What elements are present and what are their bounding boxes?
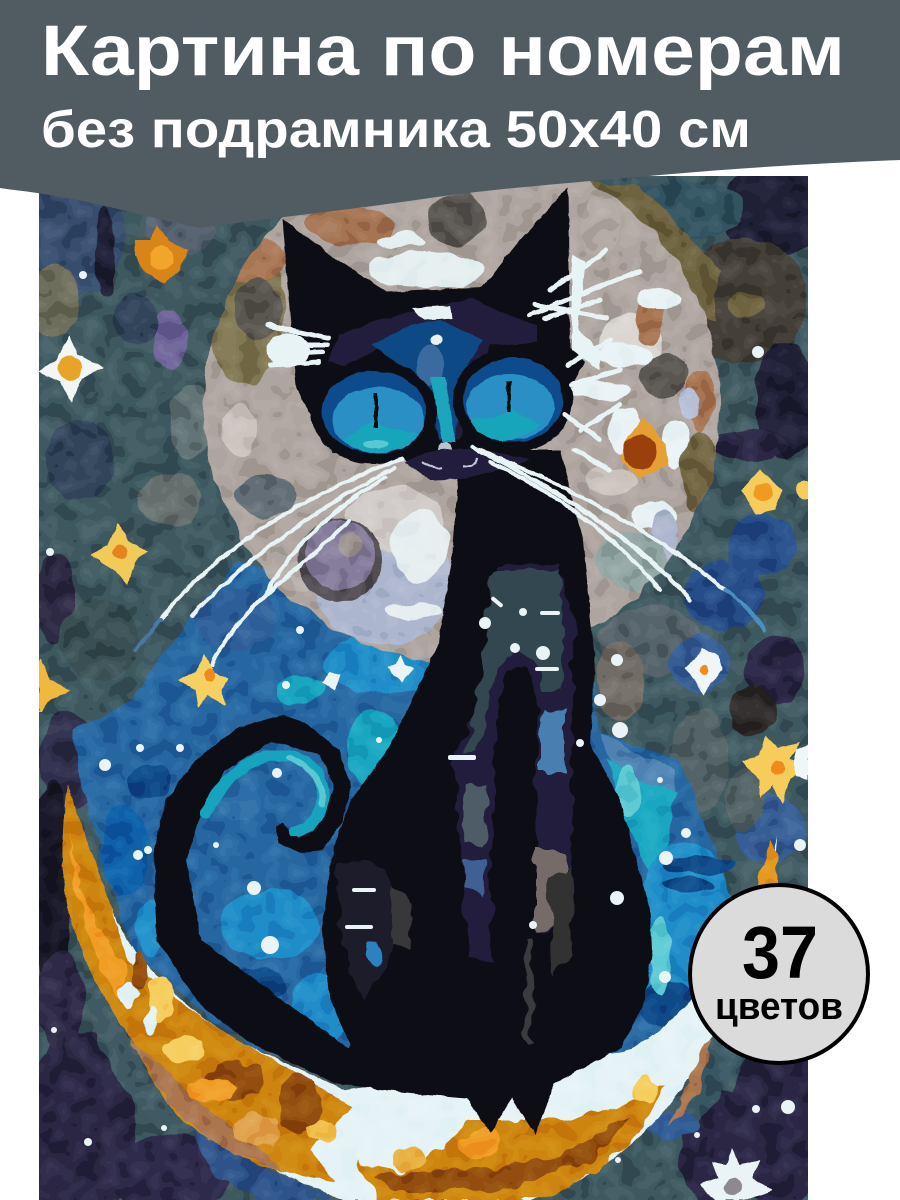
upper right (720, 165, 830, 255)
crescent moon (63, 785, 778, 1200)
heading: subtitle: без подрамника 50х40 см (41, 101, 751, 159)
crescent: gold left blotches (70, 830, 341, 1172)
deep blue disc inside the crescent (72, 560, 765, 1060)
paint speckles (46, 271, 806, 1163)
star: white left (38, 335, 104, 402)
star: white small (388, 655, 414, 682)
badge number: 37 (742, 911, 818, 994)
stars (38, 225, 814, 1200)
star: yellow right (742, 470, 782, 515)
white whisker splash left (266, 333, 310, 367)
white whisker splash right (572, 255, 600, 370)
cat tail inner swirl (206, 755, 323, 832)
whiskers (135, 250, 765, 665)
star: yellow under whisker (178, 655, 228, 707)
crescent: gold left band (63, 785, 353, 1182)
icon: left eye (311, 360, 437, 464)
forehead colouring (328, 298, 537, 440)
moon (204, 147, 720, 663)
painting background: night sky (25, 165, 830, 1200)
star: moon orange (620, 418, 668, 478)
heading: title: Картина по номерам (41, 12, 845, 91)
star: left edge (39, 660, 70, 712)
star: white small blue (322, 672, 340, 690)
cat head (282, 187, 585, 480)
chin (405, 449, 530, 480)
painting: black cat on the moon (25, 147, 830, 1200)
star: yellow left (90, 522, 148, 585)
cat body markings (338, 567, 573, 1040)
badge label: цветов (715, 986, 843, 1028)
badge: 37 colours (690, 885, 868, 1063)
header banner (0, 0, 900, 228)
star: orange top left (135, 225, 188, 283)
crescent: gold bottom band (358, 835, 778, 1200)
moon crater: purple (298, 518, 382, 602)
icon: right eye (453, 348, 573, 452)
cat tail and body silhouette (154, 450, 652, 1135)
star: white bottom right (700, 1148, 772, 1200)
star: white right (684, 648, 722, 695)
star: right edge yellow (796, 481, 814, 499)
star: yellow spiky (742, 735, 808, 805)
